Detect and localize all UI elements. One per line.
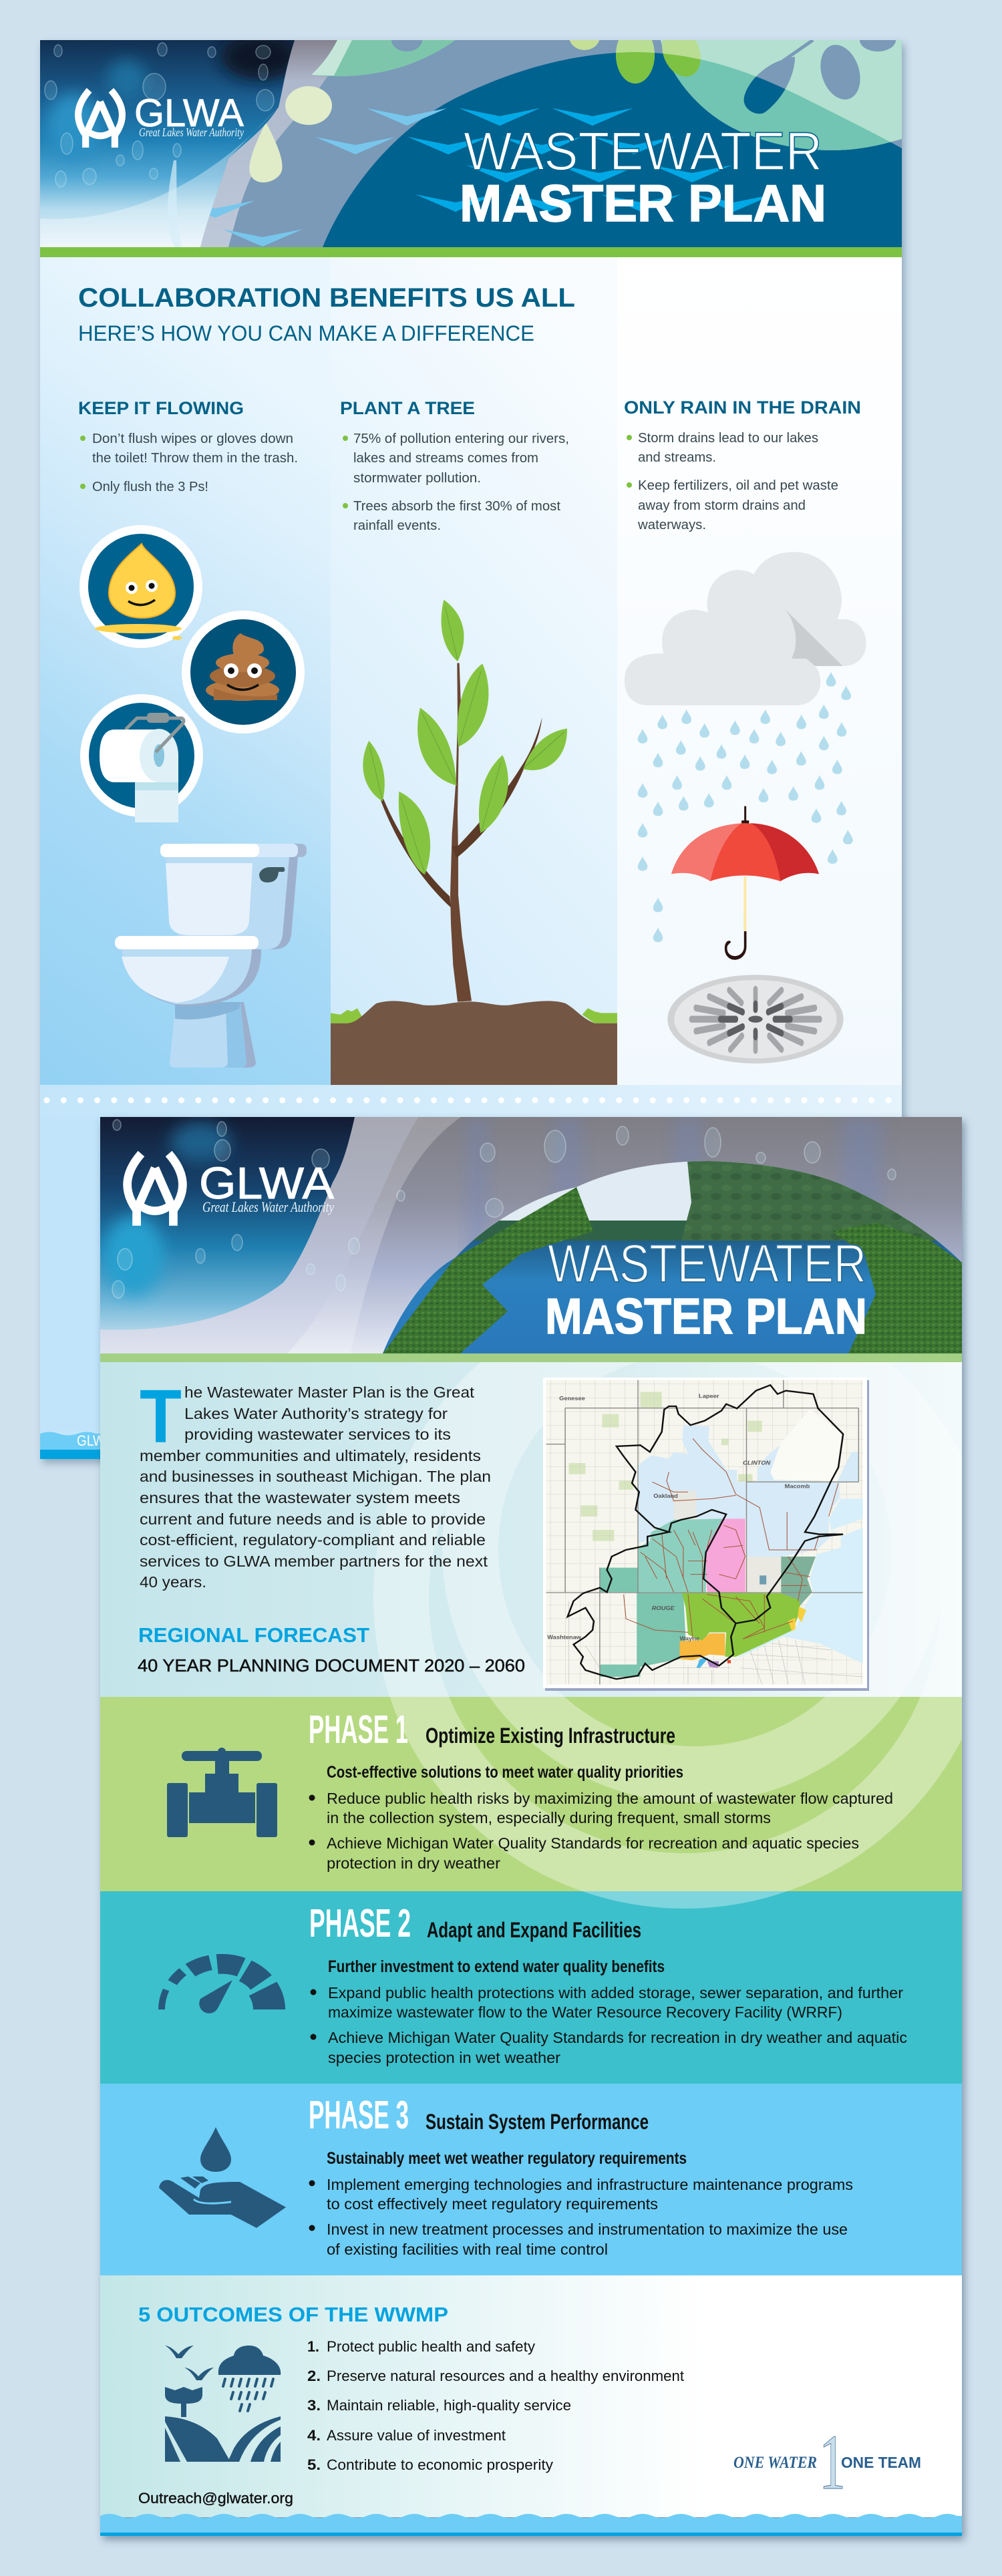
- intro text block: current and future needs and is able to provide: [140, 1510, 486, 1528]
- map labels: Genesee: [559, 1395, 585, 1402]
- phase 1: Reduce public health risks by maximizing the amount of wastewater flow captured: [327, 1790, 893, 1807]
- column: only rain in the drain: waterways.: [637, 518, 706, 532]
- green overlay shape and leaves: [661, 40, 902, 150]
- phase 3: PHASE 3: [309, 2093, 409, 2137]
- phase 1: protection in dry weather: [327, 1855, 500, 1872]
- phase 3: Implement emerging technologies and infrastructure maintenance programs: [327, 2176, 853, 2193]
- intro text block: cost-efficient, regulatory-compliant and reliable: [140, 1531, 486, 1549]
- drop cap: T: [140, 1374, 182, 1458]
- outcomes panel: [100, 2275, 962, 2517]
- light blue service area: [638, 1425, 858, 1557]
- page 2 header banner: [100, 1117, 962, 1353]
- phase 2: Achieve Michigan Water Quality Standards for recreation in dry weather and aquatic: [328, 2029, 907, 2046]
- phase 2: Adapt and Expand Facilities: [427, 1918, 641, 1942]
- phase 1: [167, 1708, 893, 1872]
- outcomes list: 5.: [307, 2456, 321, 2473]
- intro text block: and businesses in southeast Michigan. The plan: [140, 1468, 491, 1485]
- logo: one water one team: ONE WATER: [733, 2454, 817, 2472]
- icon: oil drop in circle: [79, 525, 202, 648]
- outcomes list: Preserve natural resources and a healthy environment: [327, 2368, 684, 2384]
- column: keep it flowing: Only flush the 3 Ps!: [92, 480, 208, 494]
- intro text block: member communities and ultimately, residents: [140, 1447, 481, 1464]
- soil: [331, 1001, 617, 1085]
- outcomes list: Contribute to economic prosperity: [327, 2456, 553, 2473]
- column: only rain in the drain: Storm drains lead to our lakes: [638, 431, 818, 446]
- map labels: Wayne: [679, 1635, 699, 1641]
- phase 1: PHASE 1: [309, 1708, 408, 1752]
- phase 2: Expand public health protections with added storage, sewer separation, and further: [328, 1984, 903, 2001]
- rain photo: [100, 1117, 355, 1330]
- column: only rain in the drain: [624, 397, 861, 532]
- map of service region: [543, 1378, 869, 1691]
- heading: regional forecast: [138, 1623, 525, 1675]
- white upper-right area: [770, 1410, 843, 1481]
- map labels: Macomb: [785, 1483, 810, 1489]
- phase 1 band background: [100, 1697, 962, 1891]
- column: plant a tree: Trees absorb the first 30% of most: [353, 499, 560, 514]
- heading: collaboration benefits: COLLABORATION BENEFITS US ALL: [78, 283, 575, 313]
- icon: water drop over hand: [159, 2127, 286, 2228]
- logo: GLWA: GLWA: [199, 1158, 334, 1209]
- logo: one water one team: ONE TEAM: [841, 2454, 921, 2471]
- water droplets: [112, 1120, 896, 1298]
- map labels: ROUGE: [652, 1605, 675, 1611]
- phase 3: [100, 2084, 962, 2275]
- column: plant a tree: rainfall events.: [353, 518, 441, 533]
- translucent curved band: [200, 40, 352, 247]
- map labels: [547, 1393, 810, 1641]
- umbrella: [671, 806, 819, 958]
- footer wave: [100, 2514, 962, 2536]
- trunk and branches: [450, 663, 472, 1002]
- logo: GLWA: GLWA: [134, 92, 244, 135]
- grass: [331, 1008, 617, 1023]
- column: only rain in the drain: ONLY RAIN IN THE DRAIN: [624, 397, 861, 418]
- phase 1: Cost-effective solutions to meet water quality priorities: [327, 1763, 683, 1782]
- road grid: [546, 1380, 863, 1685]
- phase 2: maximize wastewater flow to the Water Resource Recovery Facility (WRRF): [328, 2003, 842, 2021]
- column: keep it flowing: the toilet! Throw them in the trash.: [92, 451, 298, 466]
- phase 1: in the collection system, especially during frequent, small storms: [327, 1809, 771, 1826]
- outcomes list: [307, 2338, 684, 2473]
- phase 2 band background: [100, 1891, 962, 2084]
- logo mark: [78, 90, 122, 148]
- footer text: GLW: [77, 1432, 105, 1449]
- sewer lines: [624, 1438, 838, 1639]
- green divider bar: [100, 1353, 962, 1362]
- teal service areas: [638, 1518, 724, 1592]
- storm drain: [667, 975, 844, 1064]
- column: only rain in the drain: away from storm drains and: [638, 498, 806, 513]
- phase 2: Further investment to extend water quality benefits: [328, 1957, 665, 1976]
- heading: regional forecast: 40 YEAR PLANNING DOCUMENT 2020 – 2060: [138, 1655, 525, 1675]
- logo: GLWA: [128, 1154, 334, 1226]
- panel: second page poster: [100, 1117, 996, 2540]
- map labels: Lapeer: [699, 1393, 719, 1400]
- phase 3: to cost effectively meet regulatory requirements: [327, 2195, 658, 2213]
- column: plant a tree: PLANT A TREE: [340, 398, 475, 418]
- column: keep it flowing: KEEP IT FLOWING: [78, 398, 244, 418]
- green divider bar: [40, 247, 902, 257]
- phase 2: species protection in wet weather: [328, 2049, 560, 2066]
- title: [545, 1234, 867, 1344]
- city streets: [568, 1601, 863, 1685]
- column: plant a tree: stormwater pollution.: [353, 471, 481, 486]
- intro text block: Lakes Water Authority’s strategy for: [184, 1405, 448, 1422]
- icon: toilet: [115, 844, 307, 1068]
- phase 1: Optimize Existing Infrastructure: [426, 1724, 675, 1748]
- outcomes list: 3.: [307, 2397, 321, 2414]
- column: plant a tree: [340, 398, 569, 533]
- outcomes list: 1.: [307, 2338, 319, 2355]
- illustration: cloud, rain, umbrella, drain: [625, 552, 866, 1064]
- heading: 5 outcomes: 5 OUTCOMES OF THE WWMP: [138, 2303, 448, 2326]
- intro text block: [140, 1374, 491, 1591]
- title: [462, 132, 824, 222]
- column: keep it flowing: Don’t flush wipes or gloves down: [92, 432, 293, 446]
- map labels: Washtenaw: [547, 1634, 581, 1640]
- outcomes list: 2.: [307, 2368, 321, 2384]
- lake water: [735, 1528, 863, 1663]
- concentric water rings: [373, 1286, 996, 1909]
- title: MASTER PLAN: [545, 1288, 867, 1344]
- icon: environment: [165, 2346, 281, 2462]
- title: WASTEWATER: [464, 122, 822, 182]
- intro text block: ensures that the wastewater system meets: [140, 1489, 460, 1506]
- phase 3: Invest in new treatment processes and instrumentation to maximize the use: [327, 2221, 848, 2238]
- phase 3: of existing facilities with real time control: [327, 2241, 608, 2258]
- outcomes list: 4.: [307, 2427, 321, 2444]
- heading: collaboration benefits: [78, 283, 575, 345]
- title: MASTER PLAN: [460, 174, 826, 232]
- logo mark: [128, 1154, 182, 1226]
- intro background: [100, 1362, 962, 1697]
- intro text block: services to GLWA member partners for the next: [140, 1553, 488, 1570]
- blurred rain stripes: [466, 1117, 882, 1246]
- column: keep it flowing: [78, 398, 298, 494]
- illustration: tree: [331, 600, 617, 1085]
- phase 1: Achieve Michigan Water Quality Standards for recreation and aquatic species: [327, 1834, 859, 1852]
- heading: regional forecast: REGIONAL FORECAST: [138, 1623, 369, 1647]
- heading: collaboration benefits: HERE’S HOW YOU CAN MAKE A DIFFERENCE: [78, 321, 534, 345]
- chevron birds: [175, 108, 774, 247]
- phase 3: Sustainably meet wet weather regulatory requirements: [327, 2149, 687, 2168]
- cloud: [625, 552, 866, 705]
- column backgrounds: [40, 257, 902, 1085]
- orange service area: [679, 1633, 725, 1660]
- dark blue dome: [323, 52, 902, 247]
- column: plant a tree: lakes and streams comes from: [353, 451, 538, 466]
- phase 2: [162, 1901, 907, 2066]
- logo: GLWA: [78, 90, 244, 148]
- pink service area: [706, 1518, 745, 1592]
- map labels: CLINTON: [743, 1460, 771, 1466]
- logo: GLWA: Great Lakes Water Authority: [202, 1198, 334, 1215]
- icon: poop in circle: [182, 611, 305, 734]
- logo: GLWA: Great Lakes Water Authority: [139, 126, 244, 139]
- phase 2: PHASE 2: [309, 1901, 411, 1945]
- leaves: [363, 600, 567, 874]
- watershed boundary: [568, 1385, 843, 1679]
- column: only rain in the drain: Keep fertilizers, oil and pet waste: [638, 478, 838, 493]
- outcomes list: Protect public health and safety: [327, 2338, 535, 2355]
- outcomes list: Assure value of investment: [327, 2427, 506, 2444]
- footer strip with white dots: [40, 1085, 902, 1459]
- page 1 header banner: [40, 22, 902, 247]
- intro text block: he Wastewater Master Plan is the Great: [184, 1384, 475, 1401]
- logo: one water one team: 1: [819, 2418, 846, 2506]
- icon: toilet paper in circle: [80, 694, 203, 822]
- icon: gauge: [162, 1963, 269, 2014]
- outcomes list: Maintain reliable, high-quality service: [327, 2397, 571, 2414]
- county lines: [546, 1380, 863, 1685]
- green service area: [682, 1593, 800, 1657]
- contact email: Outreach@glwater.org: [138, 2490, 293, 2507]
- pale petals: [285, 86, 332, 125]
- phase 3: Sustain System Performance: [426, 2110, 649, 2134]
- title: WASTEWATER: [548, 1234, 866, 1294]
- column: plant a tree: 75% of pollution entering our rivers,: [353, 432, 569, 446]
- panel: first page poster: [40, 22, 904, 1463]
- intro text block: providing wastewater services to its: [184, 1426, 451, 1443]
- icon: valve: [167, 1748, 277, 1837]
- column: only rain in the drain: and streams.: [638, 450, 716, 465]
- intro text block: 40 years.: [140, 1573, 206, 1591]
- raindrops: [638, 672, 853, 942]
- rain photo: [40, 33, 307, 247]
- logo: one water one team: [733, 2418, 921, 2506]
- lake photo dome: [383, 1161, 962, 1353]
- map labels: Oakland: [653, 1492, 678, 1499]
- parks: [568, 1392, 762, 1541]
